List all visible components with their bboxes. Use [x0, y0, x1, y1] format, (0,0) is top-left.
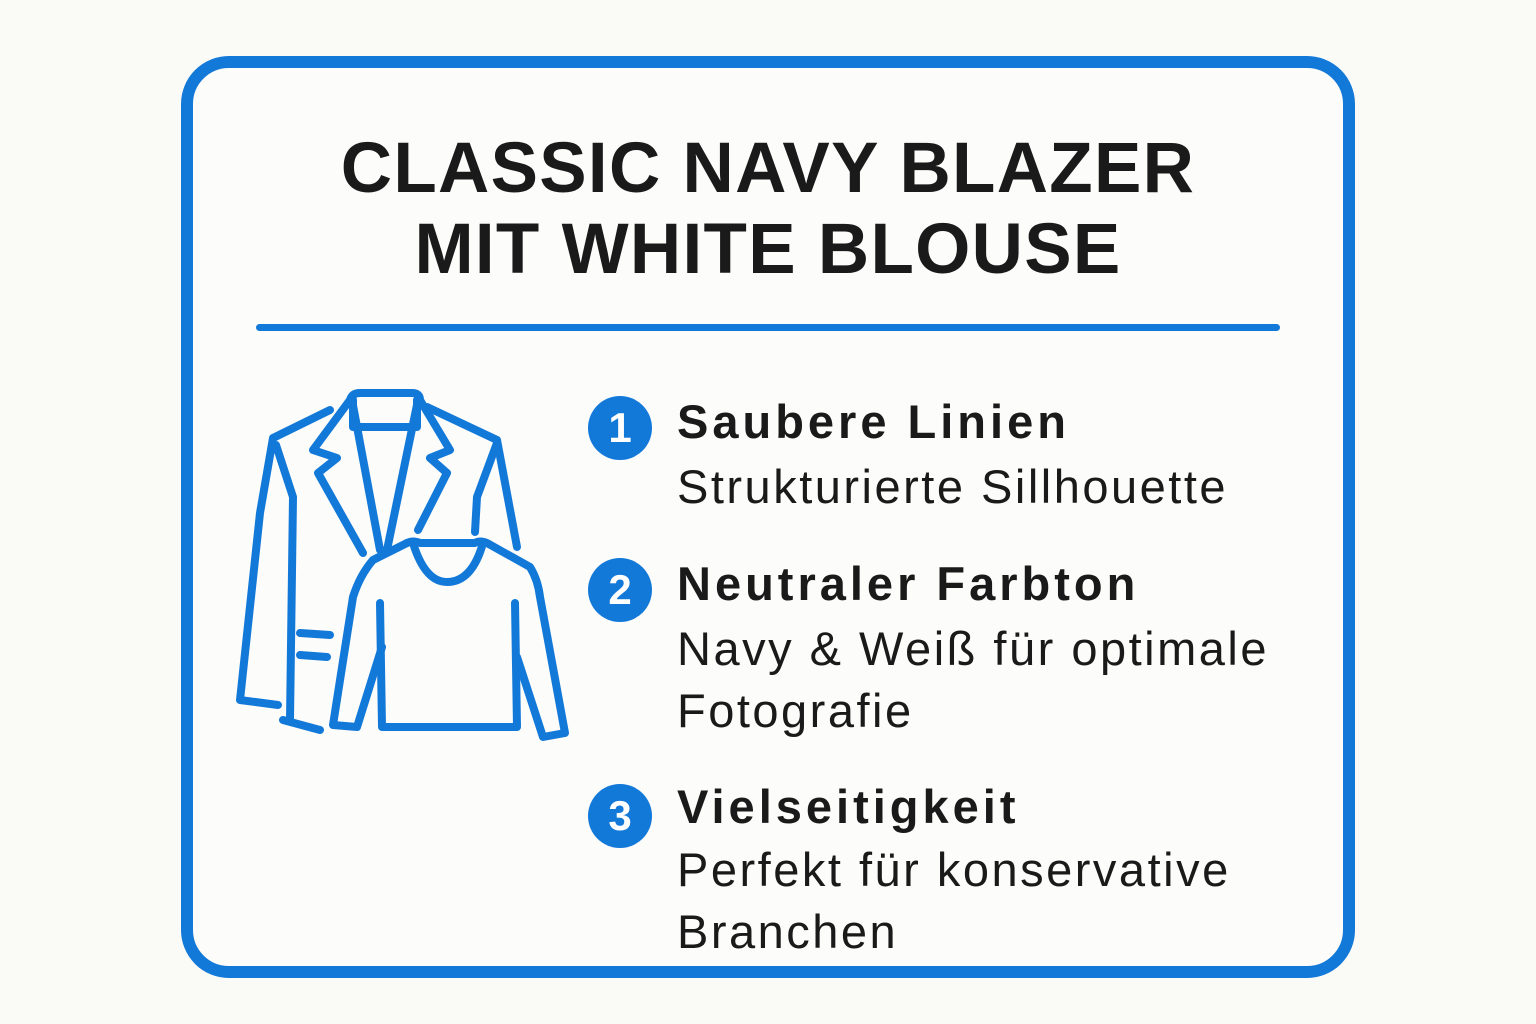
- text 3: Perfekt für konservative: [677, 843, 1231, 896]
- text 2: Fotografie: [677, 684, 914, 737]
- text 3: [677, 843, 1231, 958]
- item 2: [588, 557, 1269, 737]
- heading 2: Neutraler Farbton: [677, 557, 1139, 610]
- text 3: Branchen: [677, 905, 898, 958]
- heading 3: Vielseitigkeit: [677, 780, 1020, 833]
- panel frame: [181, 56, 1355, 978]
- number badge 2: 2: [608, 566, 632, 613]
- heading 1: Saubere Linien: [677, 395, 1070, 448]
- title: CLASSIC NAVY BLAZER: [341, 129, 1195, 208]
- number badge 1: 1: [608, 404, 632, 451]
- item 3: [588, 780, 1231, 958]
- text 1: Strukturierte Sillhouette: [677, 460, 1228, 513]
- text 2: Navy & Weiß für optimale: [677, 622, 1269, 675]
- number badge 2: [588, 558, 652, 622]
- number badge 3: [588, 784, 652, 848]
- title: MIT WHITE BLOUSE: [414, 210, 1122, 289]
- text 2: [677, 622, 1269, 737]
- title: [341, 129, 1195, 289]
- number badge 1: [588, 396, 652, 460]
- number badge 3: 3: [608, 792, 632, 839]
- item 1: [588, 395, 1228, 513]
